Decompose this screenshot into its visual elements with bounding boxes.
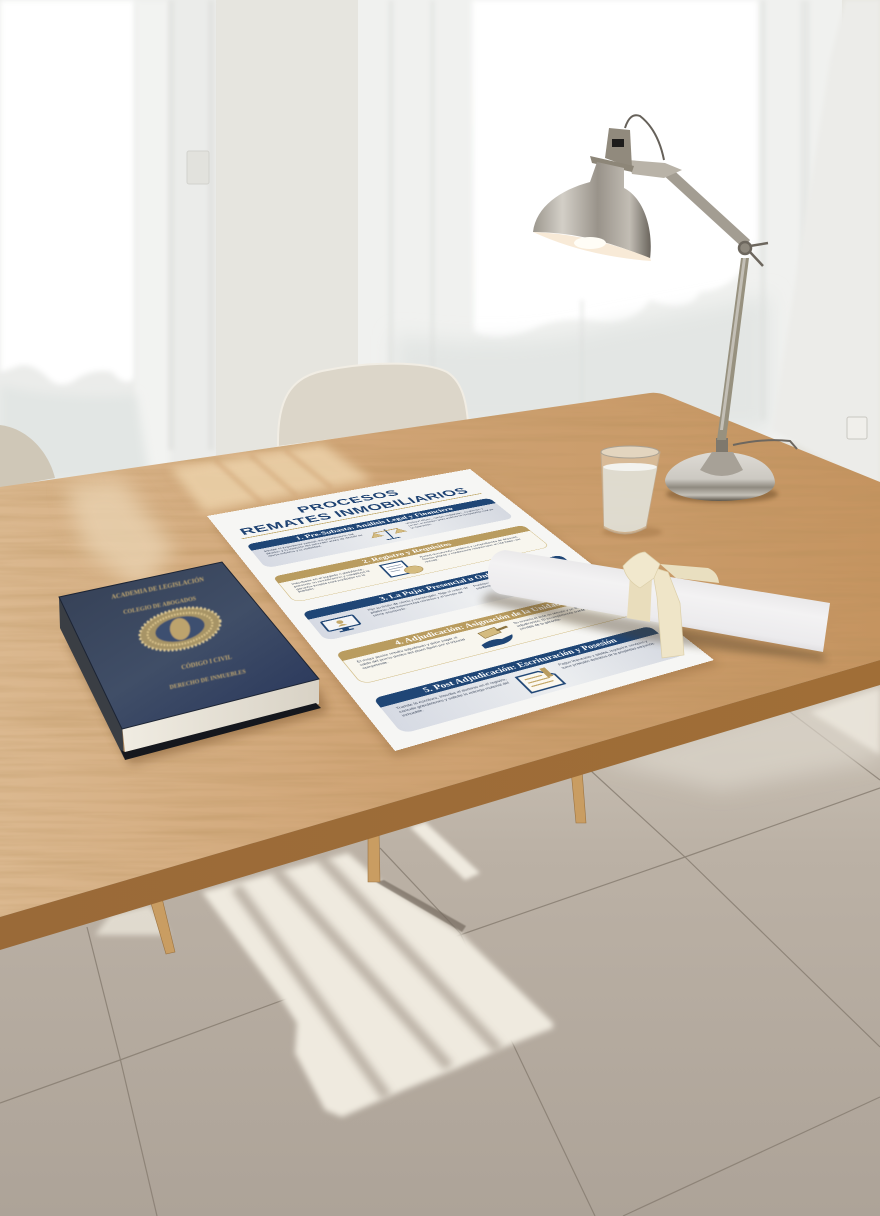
icon: monitor	[320, 614, 362, 632]
step 3	[304, 556, 568, 639]
leg shadow	[376, 880, 466, 932]
icon: scales	[372, 528, 408, 540]
wall socket	[847, 417, 867, 439]
step 2 panel	[275, 528, 551, 603]
step 5 heading	[373, 626, 659, 708]
ribbon tail	[652, 567, 684, 658]
book lower board	[121, 703, 321, 760]
table legs	[150, 770, 586, 954]
floor tile lines	[0, 712, 880, 1216]
step 1	[248, 498, 511, 567]
title rule	[241, 493, 482, 539]
step 5	[376, 627, 680, 732]
book gold emblem	[136, 601, 224, 657]
left curtain	[0, 0, 216, 490]
book cover	[59, 562, 319, 729]
step 2 left text: Inscríbase en el juzgado o plataforma, presente su identificación y constituya la garantía exigida para participar en la subasta.	[291, 568, 371, 593]
lamp upper joint	[628, 160, 682, 178]
book title text: ACADEMIA DE LEGISLACIÓN	[111, 575, 205, 601]
step 2 heading	[273, 525, 530, 583]
sunlight on table	[65, 444, 372, 590]
soft light under the table at right	[600, 680, 880, 790]
step 5 panel	[376, 629, 686, 734]
book title text: CÓDIGO I CIVIL	[180, 653, 233, 671]
ribbon end behind roll	[660, 564, 719, 583]
lamp base	[665, 452, 775, 501]
drinking glass	[601, 446, 662, 538]
lamp shade interior	[533, 232, 651, 261]
wall switch	[187, 151, 209, 184]
sun block	[170, 444, 372, 512]
lamp collar	[590, 156, 634, 172]
poster: procesos de remates inmobiliarios	[207, 469, 714, 751]
step 1 left text: Revise el expediente judicial, los gravámenes, las deudas y la tasación del inmueble antes de decidir su oferta máxima y la viabilidad.	[264, 533, 363, 557]
lamp base shadow	[666, 485, 778, 503]
book title text	[111, 575, 247, 691]
water	[603, 465, 657, 532]
step 5 right text: Pague impuestos y gastos, regularice servicios y tome posesión definitiva de la propiedad adquirida.	[558, 640, 656, 670]
step 3 heading	[302, 555, 568, 620]
lamp arm	[660, 164, 750, 249]
step 5 left text: Tramite la escritura, inscriba el dominio en el registro, cancele gravámenes y solicite la entrega material del inmueble.	[395, 678, 510, 718]
sun beam	[65, 478, 175, 590]
icon: document and coin	[378, 560, 424, 578]
step 3 right text: Participe en la sala o en línea con conexión estable y confirme cada postura realizada.	[473, 565, 566, 590]
step 4 left text: El mejor postor resulta adjudicado y debe pagar el saldo del precio dentro del plazo fijado por el tribunal competente.	[356, 636, 466, 670]
book	[59, 562, 328, 765]
step 1 heading	[246, 498, 496, 551]
icon: gavel and hand	[477, 626, 513, 648]
wood grain	[0, 390, 880, 920]
step 1 panel	[249, 500, 514, 568]
step 4 right text: Se levanta el acta de remate y se firma la adjudicación. El incumplimiento puede significar la pérdida de la garantía.	[513, 603, 607, 631]
lamp shade	[533, 162, 651, 259]
sun slats	[215, 450, 332, 503]
lamp bulb	[574, 237, 606, 249]
table front edge	[0, 660, 880, 950]
ribbon band	[627, 575, 652, 622]
lamp cord	[733, 440, 797, 449]
small streak	[410, 822, 480, 880]
lamp joint	[739, 242, 768, 266]
icon: documents	[514, 668, 566, 694]
step 3 heading: 3. La Puja: Presencial u Online	[377, 570, 503, 602]
desk lamp	[533, 115, 797, 503]
book title text: DERECHO DE INMUEBLES	[169, 669, 247, 691]
poster title line 1: PROCESOS	[294, 488, 403, 515]
step 3 panel	[305, 558, 590, 641]
poster shadow	[212, 480, 720, 757]
floor	[0, 660, 880, 1216]
step 5 heading: 5. Post Adjudicación: Escrituración y Posesión	[421, 637, 619, 694]
lamp socket	[605, 128, 632, 168]
step 3 center text: Fije su límite de oferta y manténgalo. Siga el orden de posturas, los incrementos mínimos y el tiempo de cierre anunciado.	[367, 587, 469, 617]
step 2	[274, 526, 548, 601]
roll shadow	[480, 592, 826, 662]
sunlight streaks on floor	[95, 688, 880, 1117]
lamp stem	[717, 258, 749, 440]
back chair	[278, 364, 468, 447]
lamp wire	[625, 115, 664, 160]
step 2 right text: Reúna documentos, poderes y comprobantes de depósito. Revise plazos y condiciones establecidas en las bases del remate.	[419, 536, 522, 563]
step 2 heading: 2. Registro y Requisitos	[360, 541, 453, 564]
table top	[0, 393, 880, 917]
window-bar shadows	[236, 857, 499, 1097]
book pages	[122, 678, 319, 752]
book title text: COLEGIO DE ABOGADOS	[123, 596, 197, 616]
ribbon bow	[623, 552, 660, 588]
step 4 heading: 4. Adjudicación: Asignación de la Unidad	[392, 601, 563, 646]
step 1 heading: 1. Pre-Subasta: Análisis Legal y Financiero	[294, 506, 455, 541]
right curtain	[358, 0, 880, 490]
leg reflection light	[95, 905, 170, 935]
step 1 right text: Verifique títulos, cargas registrales, ocupación y costos asociados para estimar la rentabilidad real de la operación.	[405, 508, 494, 529]
step 4	[338, 601, 627, 683]
poster title line 2: REMATES INMOBILIARIOS	[237, 486, 472, 537]
step 4 heading	[335, 589, 611, 661]
left chair	[0, 425, 55, 488]
step 4 panel	[338, 592, 635, 685]
book shadow	[66, 640, 328, 765]
glass body	[601, 452, 660, 534]
right patch	[810, 688, 880, 755]
wall	[0, 0, 880, 500]
glass shadow	[602, 526, 662, 538]
main patch of sunlight	[202, 853, 553, 1117]
book spine	[59, 597, 124, 758]
roll body	[488, 550, 830, 652]
